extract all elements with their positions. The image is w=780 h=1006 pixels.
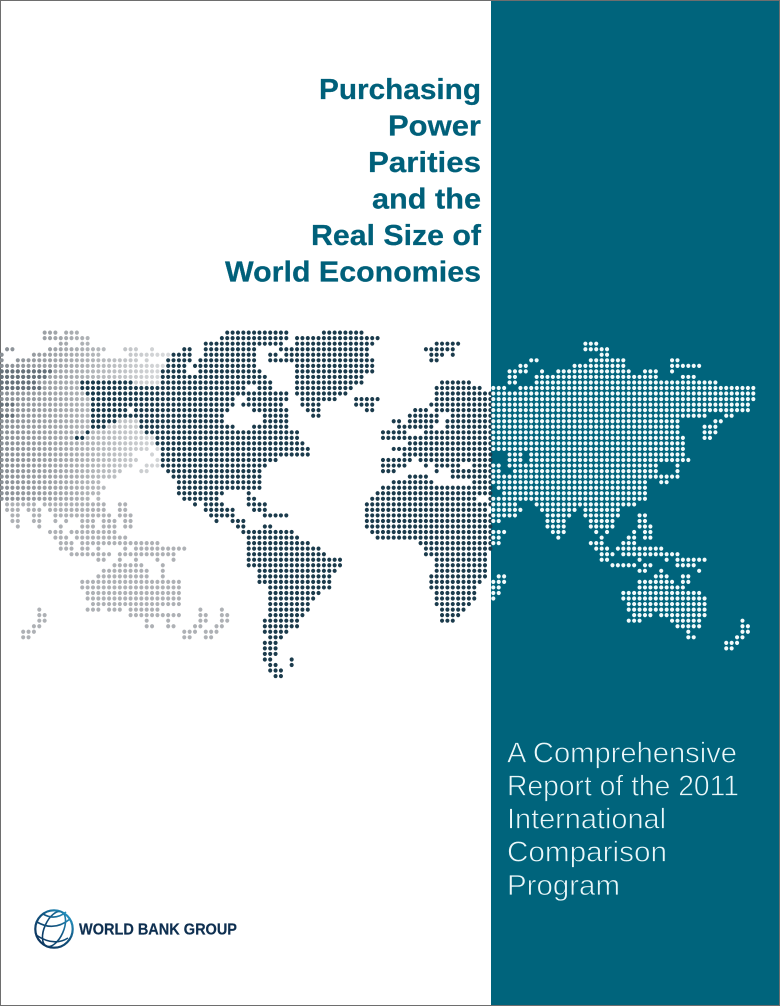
subtitle: International [507, 804, 666, 836]
title: Parities [368, 147, 481, 179]
subtitle: A Comprehensive [507, 738, 737, 770]
title: World Economies [225, 256, 481, 288]
white dots: Asia and Oceania on teal [493, 344, 754, 648]
title: and the [372, 184, 481, 216]
title: Purchasing [319, 74, 481, 106]
title [225, 74, 481, 288]
dark dots: Americas, Europe, Africa [77, 333, 491, 676]
dot world map [2, 333, 754, 676]
faded grey dots: Asia wrap-around, upper [2, 333, 169, 499]
subtitle: Comparison [507, 836, 667, 868]
subtitle: Program [507, 870, 620, 902]
subtitle [507, 738, 739, 902]
title: Real Size of [311, 220, 481, 252]
icon: globe [35, 908, 73, 950]
logo text: WORLD BANK GROUP [79, 922, 237, 938]
darker grey dots at far left [2, 371, 51, 416]
World Bank Group logo [35, 908, 237, 950]
title: Power [388, 110, 481, 142]
subtitle: Report of the 2011 [507, 770, 739, 802]
faded grey dots: South-East Asia and Australia [7, 504, 228, 637]
panel: teal right column [491, 0, 780, 1006]
